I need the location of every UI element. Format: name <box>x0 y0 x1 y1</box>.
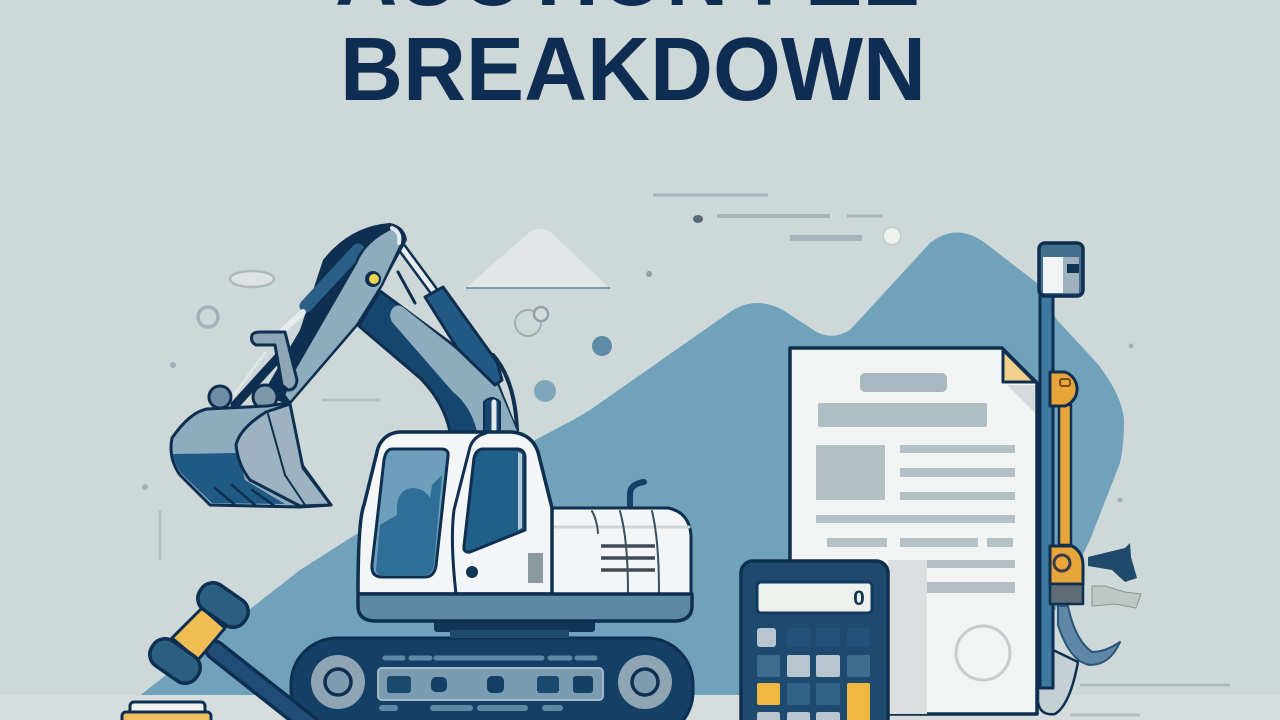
distant white mountain <box>466 229 610 288</box>
loose key <box>1092 586 1141 608</box>
calculator <box>741 561 888 720</box>
door latch <box>528 553 543 583</box>
door handle <box>466 566 478 578</box>
orange bar <box>1059 405 1071 545</box>
engine housing <box>550 508 691 594</box>
pole shaft <box>1040 296 1053 688</box>
floor <box>0 695 1280 720</box>
gavel lower cap <box>144 633 206 689</box>
track plate <box>378 668 603 700</box>
floating background marks <box>142 195 1230 715</box>
calculator display: 0 <box>853 587 865 610</box>
measuring pole <box>1038 243 1141 714</box>
sound block <box>122 702 211 720</box>
right wheel <box>618 655 672 709</box>
calculator body <box>741 561 888 720</box>
gavel handle <box>215 650 310 720</box>
calculator shadow on page <box>888 560 927 714</box>
document image placeholder <box>816 445 885 500</box>
gavel top cap <box>192 577 254 633</box>
excavator cab <box>358 432 552 594</box>
left wheel <box>311 655 365 709</box>
orange lower clamp <box>1050 546 1083 604</box>
document header pill <box>860 373 947 392</box>
gavel <box>122 577 310 720</box>
loose dark parts <box>1088 543 1137 582</box>
excavator <box>171 223 693 720</box>
calculator display <box>757 582 872 613</box>
left cab window with operator <box>372 449 448 577</box>
background mountains <box>138 232 1124 697</box>
page fold <box>1003 350 1035 382</box>
orange upper knob <box>1050 372 1077 406</box>
document stamp circle <box>956 626 1010 680</box>
undercarriage <box>434 618 595 638</box>
document text lines <box>816 445 1015 593</box>
excavator boom <box>359 248 517 432</box>
fold shadow <box>1007 385 1035 413</box>
document title bar <box>818 403 987 427</box>
bucket linkage <box>209 332 297 409</box>
document <box>790 348 1037 714</box>
excavator deck <box>358 594 692 621</box>
gavel head <box>172 608 225 660</box>
excavator bucket <box>171 403 331 507</box>
pole head <box>1039 243 1083 296</box>
pole lower curve <box>1038 650 1078 714</box>
right cab window <box>464 449 525 552</box>
excavator track <box>291 638 693 720</box>
title: BREAKDOWN <box>340 20 926 120</box>
document page <box>790 348 1037 714</box>
excavator arm <box>262 223 407 405</box>
calculator keys <box>757 628 870 720</box>
hose <box>1058 606 1120 665</box>
exhaust pipe <box>630 482 644 508</box>
